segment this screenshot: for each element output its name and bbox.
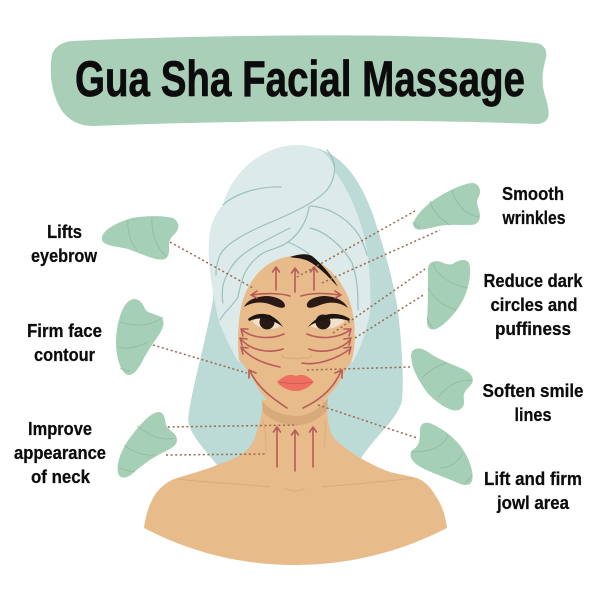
- label: lifts eyebrow: Lifts: [47, 222, 82, 242]
- label: lift and firm jowl area: [484, 469, 582, 513]
- left eyebrow: [244, 296, 285, 308]
- left eye: [248, 314, 283, 330]
- stone: face contour: [116, 299, 163, 375]
- body and neck: [144, 400, 447, 565]
- face: [238, 256, 355, 416]
- label: improve appearance of neck: Improve: [28, 419, 92, 439]
- right eye: [308, 314, 350, 330]
- label: firm face contour: Firm face: [27, 321, 102, 341]
- stone: smile lines: [411, 348, 473, 411]
- dotted leader lines: [153, 211, 440, 455]
- label: reduce dark circles and puffiness: puffiness: [495, 319, 571, 339]
- label: lift and firm jowl area: jowl area: [496, 493, 570, 513]
- massage arrows: [240, 267, 351, 471]
- label: improve appearance of neck: [14, 419, 106, 487]
- chin shadow: [262, 398, 328, 425]
- label: reduce dark circles and puffiness: circles and: [490, 295, 578, 315]
- label: soften smile lines: [482, 381, 584, 425]
- title banner: [51, 35, 549, 126]
- collarbone lines: [178, 478, 413, 491]
- label: soften smile lines: Soften smile: [482, 381, 584, 401]
- stone: wrinkles: [413, 183, 480, 230]
- label: soften smile lines: lines: [514, 405, 552, 425]
- stone: jowl: [410, 423, 473, 485]
- label: smooth wrinkles: wrinkles: [502, 208, 566, 228]
- nose: [282, 354, 312, 359]
- label: reduce dark circles and puffiness: Reduce dark: [484, 271, 583, 291]
- stone: dark circles: [427, 260, 470, 330]
- label: lifts eyebrow: eyebrow: [31, 246, 98, 266]
- label: lifts eyebrow: [31, 222, 98, 266]
- towel wrap: [209, 145, 370, 362]
- neck lines: [263, 420, 325, 453]
- label: smooth wrinkles: Smooth: [502, 184, 564, 204]
- towel back: [188, 146, 403, 465]
- hair: [290, 254, 338, 287]
- label: improve appearance of neck: appearance: [14, 443, 106, 463]
- label: improve appearance of neck: of neck: [31, 467, 91, 487]
- stone: neck: [118, 412, 177, 478]
- label: smooth wrinkles: [502, 184, 566, 228]
- label: firm face contour: contour: [34, 345, 95, 365]
- woman illustration: [144, 145, 447, 565]
- right eyebrow: [307, 296, 348, 308]
- towel fold lines: [216, 150, 367, 320]
- stone: eyebrow: [102, 216, 178, 260]
- lips: [277, 375, 314, 391]
- label: lift and firm jowl area: Lift and firm: [484, 469, 582, 489]
- label: firm face contour: [27, 321, 102, 365]
- label: reduce dark circles and puffiness: [484, 271, 583, 339]
